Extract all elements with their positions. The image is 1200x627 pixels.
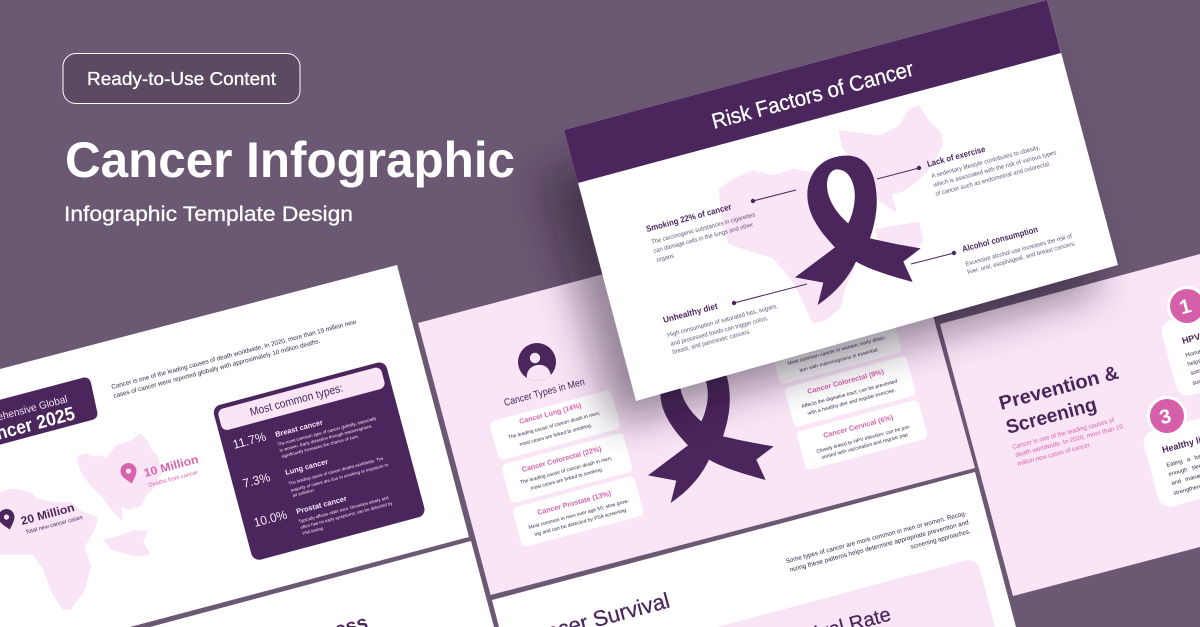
- card: cancer prostate: Most common in men over age 50; slow grow-: [528, 498, 630, 531]
- factor: lack of exercise: A sedentary lifestyle contributes to obesity,: [931, 144, 1041, 180]
- card: cancer colorectal men: Cancer Colorectal (22%): [521, 444, 603, 474]
- item: breast cancer: The most common type of cancer globally, especially: [277, 416, 378, 447]
- item: breast cancer: in women. Early detection through mammograms: [279, 423, 373, 453]
- factor: smoking: organs: [656, 253, 675, 264]
- factor: smoking: Smoking 22% of cancer: [645, 201, 733, 234]
- icon: person: [518, 343, 556, 381]
- item: breast cancer: Breast cancer: [274, 418, 324, 439]
- item: prostat cancer: often has no early symptoms; can be detected by: [300, 500, 394, 530]
- factor: smoking: [645, 201, 756, 264]
- card: breast women: tion with mammograms is essential.: [799, 347, 880, 374]
- card: cancer colorectal women: with a healthy diet and regular exercise.: [807, 388, 896, 417]
- card: cancer colorectal women: Cancer Colorectal (9%): [806, 367, 885, 396]
- main title: Cancer Infographic: [65, 132, 515, 188]
- panel: cancer types slide: [418, 274, 975, 595]
- label pill: ready-to-use content: [63, 54, 300, 104]
- factor: unhealthy diet: breast, and pancreatic cancers.: [672, 328, 752, 356]
- heading: prevention and screening: Screening: [1004, 394, 1099, 439]
- pink description: million new cases of cancer.: [1017, 441, 1092, 468]
- pink description: Cancer is one of the leading causes of: [1012, 417, 1115, 451]
- item: prostat cancer: Typically affects older men. Develops slowly and: [298, 495, 390, 524]
- panel: cancer survival slide: [492, 472, 1016, 627]
- card: cancer colorectal men: [501, 432, 633, 504]
- panel: risk factors slide: [564, 0, 1118, 401]
- connector lines: [732, 166, 956, 305]
- title box: comprehensive global cancer 2025: [0, 378, 97, 450]
- card: breast women: [774, 328, 901, 384]
- item: lung cancer: The leading cause of cancer deaths worldwide. The: [288, 456, 384, 486]
- panel: global overview slide: [0, 265, 469, 627]
- factor: unhealthy diet: [662, 301, 779, 356]
- item: lung cancer: [241, 456, 389, 498]
- card: cancer cervical: Cancer Cervical (6%): [822, 412, 895, 440]
- item: breast cancer: 11.7%: [231, 430, 268, 452]
- heading: cancer types in men: Cancer Types in Men: [503, 377, 586, 409]
- card: cancer lung: Cancer Lung (14%): [518, 401, 583, 426]
- factor: alcohol consumption: liver, oral, esophageal, and breast cancers.: [967, 240, 1077, 276]
- card: cancer cervical: Closely linked to HPV infection; can be pre-: [816, 424, 912, 455]
- shadow under risk factors slide: [531, 152, 1120, 445]
- title: risk factors of cancer: Risk Factors of Cancer: [709, 57, 916, 134]
- card: cancer lung: [489, 389, 621, 461]
- pink description: [1012, 417, 1124, 468]
- card: cancer lung: most cases are linked to smoking.: [519, 423, 593, 448]
- stat: 20 million cases: 20 Million: [20, 502, 76, 528]
- note text: nizing these patterns helps determine appropriate prevention and: [789, 519, 970, 574]
- card: cancer colorectal men: The leading cause of cancer death in men;: [519, 456, 613, 486]
- card: cancer cervical: vented with vaccination and regular pap: [821, 432, 909, 461]
- item: prostat cancer: 10.0%: [252, 508, 289, 530]
- card: cancer colorectal women: Affects the digestive tract; can be prevented: [801, 378, 898, 410]
- factor: unhealthy diet: and processed foods can trigger colon,: [670, 315, 769, 348]
- stat: 20 million cases: [21, 505, 83, 534]
- card 1: HPV vaccination: 1: [1177, 295, 1194, 319]
- card: cancer prostate: [512, 475, 644, 548]
- factor: alcohol consumption: Alcohol consumption: [961, 224, 1039, 254]
- factor: lack of exercise: of cancer such as endometrial and colorectal.: [935, 160, 1052, 198]
- item: lung cancer: majority of cases are due to smoking or exposure to: [290, 462, 389, 493]
- item: breast cancer: significantly increases the chance of cure.: [281, 433, 360, 459]
- card: breast women: Most common cancer in women; early detec-: [787, 335, 887, 367]
- heading: prevention and screening: Prevention &: [997, 362, 1121, 415]
- ribbon: purple awareness: [795, 156, 921, 305]
- panel header: [217, 366, 386, 431]
- icon: pink map pin: [120, 463, 136, 484]
- pink description: death worldwide. In 2020, more than 19: [1015, 423, 1124, 459]
- card 1: HPV vaccination: [1159, 286, 1200, 398]
- heading: prevention and screening: [998, 366, 1120, 433]
- stat: 10 million deaths: Deaths from cancer: [148, 470, 199, 489]
- intro text: Cancer is one of the leading causes of death worldwide. In 2020, more than 19 million new: [111, 319, 357, 391]
- card: cancer prostate: Cancer Prostate (13%): [536, 488, 612, 517]
- ribbon: awareness centre: [648, 376, 774, 503]
- factor: alcohol consumption: Excessive alcohol use increases the risk of: [965, 233, 1073, 268]
- card: cancer colorectal men: most cases are linked to smoking.: [530, 467, 604, 492]
- item: breast cancer: [231, 416, 378, 459]
- stat: 20 million cases: Total new cancer cases: [25, 515, 84, 536]
- card: cancer cervical: [796, 399, 928, 471]
- subtitle: Infographic Template Design: [64, 203, 353, 226]
- panel: most common types: [212, 361, 426, 562]
- world map background: [0, 435, 160, 608]
- factor: unhealthy diet: Unhealthy diet: [662, 301, 719, 325]
- survival rate panel: [717, 560, 995, 627]
- item: prostat cancer: [252, 494, 394, 536]
- factor: smoking: can damage cells in the lungs and other: [653, 222, 754, 255]
- card 3: healthy lifestyle: 3: [1157, 405, 1174, 429]
- card: cancer colorectal women: [784, 355, 916, 428]
- icon: dark map pin: [0, 509, 14, 530]
- panel heading text: Most common types:: [249, 382, 345, 419]
- factor: smoking: The carcinogenic substances in cigarettes: [651, 211, 756, 246]
- item: lung cancer: Lung cancer: [284, 457, 329, 477]
- card: cancer lung: The leading cause of cancer death in men;: [507, 411, 601, 441]
- item: prostat cancer: PSA testing.: [302, 525, 325, 536]
- item: prostat cancer: Prostat cancer: [295, 494, 348, 516]
- card 3: healthy lifestyle: [1141, 396, 1200, 509]
- item: lung cancer: 7.3%: [241, 470, 272, 491]
- factor: alcohol consumption: [961, 224, 1077, 276]
- panel: awareness slide: [150, 541, 494, 627]
- factor: unhealthy diet: High consumption of saturated fats, sugars,: [667, 303, 779, 339]
- item: lung cancer: air pollution.: [292, 487, 315, 498]
- map background: [720, 107, 942, 322]
- panel: prevention and screening slide: [940, 254, 1200, 596]
- intro text: cases of cancer were reported globally with approximately 10 million deaths.: [113, 338, 321, 400]
- stat: 10 million deaths: 10 Million: [143, 454, 200, 480]
- factor: lack of exercise: Lack of exercise: [926, 144, 987, 169]
- card: cancer prostate: ing and can be detected by PSA screening.: [534, 507, 628, 538]
- note text: Some types of cancer are more common in men or women. Recog-: [785, 510, 968, 565]
- label pill: ready-to-use content: Ready-to-Use Content: [87, 69, 276, 89]
- factor: lack of exercise: which is associated with the risk of various types: [932, 149, 1057, 189]
- factor: lack of exercise: [926, 144, 1057, 198]
- header band: [564, 0, 1061, 183]
- stat: 10 million deaths: [144, 457, 198, 487]
- note text: screening approaches.: [910, 528, 972, 551]
